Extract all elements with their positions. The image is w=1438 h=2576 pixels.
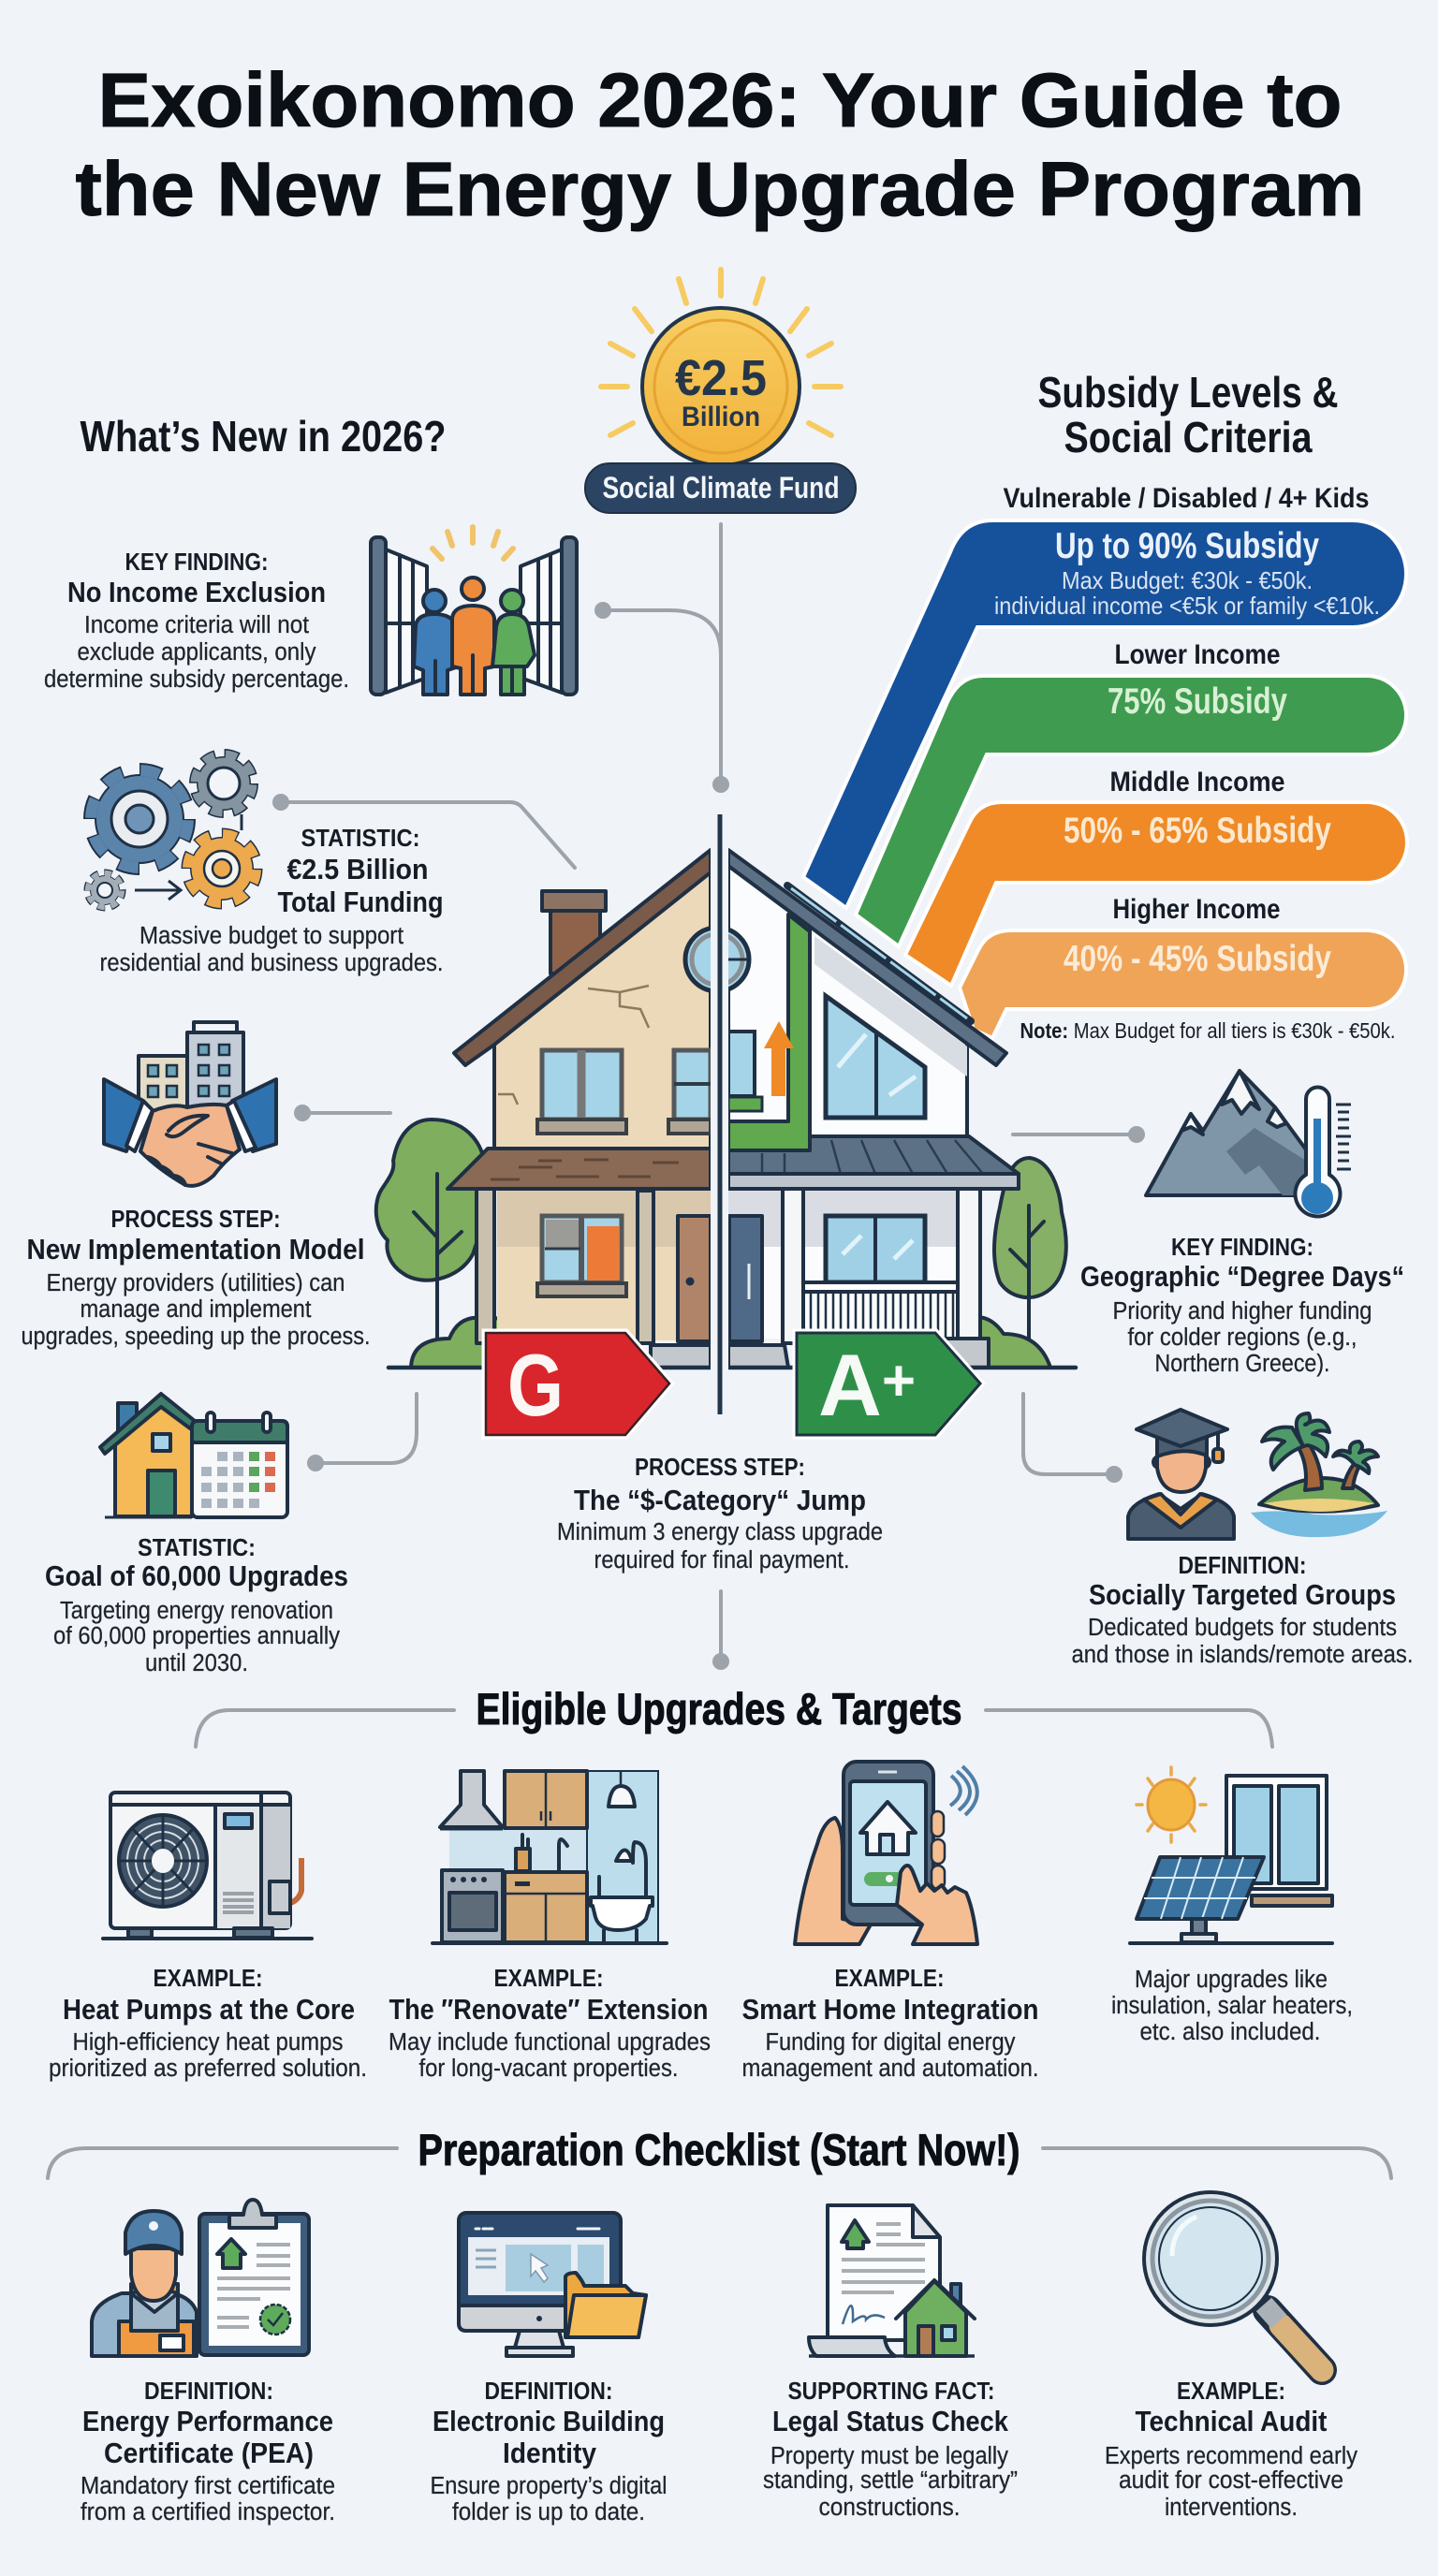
text: Geographic Degree Days: for colder regions (e.g., — [1127, 1325, 1357, 1351]
tier 1 text — [994, 483, 1380, 620]
tier 1 text: Max Budget: €30k - €50k. — [1062, 566, 1313, 594]
connector: fund to house — [594, 524, 729, 793]
badge: Social Climate Fund: Social Climate Fund — [603, 471, 839, 505]
text: Electronic Building Identity: Ensure property’s digital — [431, 2473, 667, 2499]
connector: implementation — [294, 1105, 390, 1121]
heading: Preparation Checklist: Preparation Checklist (Start Now!) — [418, 2125, 1020, 2174]
energy label: G: G — [507, 1336, 564, 1434]
icon: kitchen and bathroom — [433, 1771, 667, 1943]
text: Heat Pumps: EXAMPLE: — [154, 1964, 262, 1992]
text: Technical Audit — [1105, 2377, 1357, 2521]
text: S-Category Jump: Minimum 3 energy class upgrade — [557, 1519, 883, 1545]
text: 2.5 Billion total funding: STATISTIC: — [301, 824, 419, 852]
icon: smartphone smart home — [795, 1762, 977, 1944]
text: New Implementation Model: Energy providers (utilities) can — [47, 1270, 345, 1296]
text: Heat Pumps — [49, 1964, 367, 2082]
cracks — [498, 986, 649, 1264]
text: Major upgrades: Major upgrades like — [1135, 1967, 1328, 1993]
old half: porch roof — [448, 1149, 711, 1189]
icon: gold coin with sun rays: Billion — [682, 402, 760, 432]
text: 2.5 Billion total funding: Total Funding — [277, 886, 444, 918]
text: Technical Audit: Technical Audit — [1135, 2405, 1328, 2437]
tier 2 text: Lower Income — [1114, 639, 1281, 670]
new half: columns — [783, 1189, 980, 1343]
icon: heat pump — [103, 1793, 312, 1939]
text: Electronic Building Identity — [431, 2377, 667, 2525]
title — [75, 58, 1365, 232]
icon: gold coin with sun rays — [601, 270, 841, 465]
tier bar: light orange — [960, 930, 1406, 1038]
text: Legal Status Check — [763, 2377, 1018, 2521]
tree right — [994, 1158, 1066, 1343]
bushes — [411, 1318, 562, 1368]
text: Legal Status Check: Legal Status Check — [772, 2405, 1009, 2437]
text: Renovate Extension: EXAMPLE: — [494, 1964, 603, 1992]
text: Legal Status Check: SUPPORTING FACT: — [788, 2377, 994, 2405]
text: Goal of 60,000 Upgrades: Targeting energy renovation — [60, 1598, 333, 1624]
text: Goal of 60,000 Upgrades: of 60,000 properties annually — [53, 1623, 340, 1649]
tier 4 text: Higher Income — [1112, 894, 1281, 925]
icon: island with palms — [1251, 1413, 1387, 1537]
tier bar: green — [856, 676, 1406, 946]
heading: Subsidy Levels: Social Criteria — [1064, 413, 1313, 461]
tier 1 text: Vulnerable / Disabled / 4+ Kids — [1004, 483, 1369, 514]
text: Technical Audit: Experts recommend early — [1105, 2443, 1357, 2469]
connector: social groups — [1023, 1394, 1123, 1483]
text: Energy Performance Certificate — [81, 2377, 335, 2525]
old half: lower wall — [497, 1191, 711, 1340]
new half: window — [826, 1216, 925, 1282]
text: No Income Exclusion: Income criteria will not — [84, 612, 309, 638]
text: Geographic Degree Days — [1080, 1233, 1404, 1377]
text: Socially Targeted Groups: Dedicated budgets for students — [1088, 1615, 1397, 1641]
text: Socially Targeted Groups — [1071, 1551, 1414, 1668]
text: Renovate Extension: The ″Renovate″ Extension — [389, 1993, 708, 2026]
text: Geographic Degree Days: Northern Greece). — [1155, 1351, 1329, 1377]
heading: Eligible Upgrades and Targets: Eligible Upgrades & Targets — [476, 1684, 962, 1734]
tier bar: blue — [803, 520, 1406, 908]
old half: lower window — [537, 1216, 626, 1296]
tree left — [376, 1120, 486, 1343]
text: Goal of 60,000 Upgrades: until 2030. — [145, 1650, 248, 1676]
text: Smart Home Integration: EXAMPLE: — [835, 1964, 944, 1992]
new half: lower wall — [728, 1189, 972, 1339]
text: Socially Targeted Groups: and those in islands/remote areas. — [1071, 1642, 1414, 1668]
icon: house and calendar — [100, 1394, 287, 1517]
new half: green insulation — [728, 915, 810, 1150]
new half: round window — [685, 928, 749, 991]
text: Heat Pumps: Heat Pumps at the Core — [63, 1993, 355, 2026]
old half: door — [678, 1216, 711, 1341]
text: 2.5 Billion total funding: €2.5 Billion — [286, 853, 429, 886]
arrow: upgrade up — [764, 1021, 794, 1096]
text: Goal of 60,000 Upgrades: Goal of 60,000 Upgrades — [45, 1559, 348, 1592]
text: No Income Exclusion: determine subsidy percentage. — [44, 666, 349, 693]
text: New Implementation Model: manage and implement — [81, 1296, 311, 1323]
new half: porch roof — [728, 1136, 1019, 1189]
tier 4 text: 40% - 45% Subsidy — [1064, 939, 1331, 979]
text: No Income Exclusion — [44, 548, 349, 693]
text: Heat Pumps: prioritized as preferred solution. — [49, 2056, 367, 2082]
old half: columns — [477, 1189, 653, 1343]
text: Energy Performance Certificate: from a certified inspector. — [81, 2499, 335, 2525]
text: 2.5 Billion total funding: Massive budget to support — [139, 923, 404, 949]
energy label: A+: A — [818, 1336, 882, 1434]
text: Legal Status Check: Property must be legally — [770, 2443, 1008, 2469]
tier 2 text — [1108, 639, 1287, 722]
new half: roof — [728, 850, 1006, 1065]
new half: wall — [728, 866, 967, 1140]
tier 4 text — [1064, 894, 1331, 979]
text: Major upgrades: etc. also included. — [1140, 2019, 1320, 2045]
new half: door — [729, 1216, 762, 1341]
text: Renovate Extension — [389, 1964, 711, 2082]
divider line — [717, 814, 723, 1414]
text: Energy Performance Certificate: Mandatory first certificate — [81, 2473, 335, 2499]
icon: legal document with house — [809, 2205, 975, 2356]
title: the New Energy Upgrade Program — [75, 147, 1365, 232]
text: Socially Targeted Groups: Socially Targeted Groups — [1089, 1578, 1396, 1611]
text: S-Category Jump: The “$-Category“ Jump — [574, 1484, 866, 1516]
energy label: G — [486, 1333, 669, 1435]
old half: upper wall — [494, 866, 711, 1151]
new half: centre window — [728, 1032, 762, 1111]
connector: geographic — [1013, 1126, 1145, 1143]
title: Exoikonomo 2026: Your Guide to — [97, 58, 1343, 143]
divider gap — [711, 824, 728, 1415]
text: Heat Pumps: High-efficiency heat pumps — [73, 2029, 343, 2056]
text: 2.5 Billion total funding — [99, 824, 444, 976]
old half: roof — [454, 850, 711, 1065]
tier 3 text — [1064, 767, 1331, 851]
icon: graduate — [1128, 1410, 1234, 1539]
heading: Subsidy Levels — [1037, 368, 1339, 461]
heading: Preparation Checklist — [48, 2125, 1391, 2178]
text: Technical Audit: interventions. — [1165, 2495, 1298, 2521]
text: Smart Home Integration: Funding for digital energy — [766, 2029, 1016, 2056]
icon: inspector with clipboard — [92, 2200, 309, 2356]
icon: window, solar panel and sun — [1130, 1767, 1332, 1943]
text: Major upgrades — [1111, 1967, 1353, 2045]
tier 3 text: Middle Income — [1110, 767, 1284, 798]
new half: triangular window — [826, 996, 925, 1118]
connector: center to upgrades — [712, 1591, 729, 1670]
connector: funding — [272, 794, 575, 868]
text: Renovate Extension: May include functional upgrades — [389, 2029, 711, 2056]
tier 1 text: Up to 90% Subsidy — [1055, 526, 1319, 566]
text: Electronic Building Identity: folder is up to date. — [452, 2499, 645, 2525]
text: Legal Status Check: constructions. — [818, 2495, 961, 2521]
new half: solar strip — [787, 886, 971, 1021]
connector: goal — [307, 1394, 417, 1471]
text: Electronic Building Identity: Electronic Building — [433, 2405, 665, 2437]
old half: centre window — [668, 1050, 711, 1134]
text: New Implementation Model — [21, 1205, 371, 1350]
text: Technical Audit: EXAMPLE: — [1177, 2377, 1285, 2405]
icon: gold coin with sun rays: €2.5 — [675, 350, 767, 406]
text: No Income Exclusion: KEY FINDING: — [125, 548, 268, 576]
text: Major upgrades: insulation, salar heaters, — [1111, 1993, 1353, 2019]
icon: magnifying glass — [1144, 2192, 1322, 2370]
old half: steps — [651, 1345, 711, 1368]
energy label: A+ — [797, 1333, 980, 1435]
icon: gears — [88, 754, 257, 907]
new half: steps — [728, 1345, 788, 1368]
text: New Implementation Model: PROCESS STEP: — [110, 1205, 281, 1233]
icon: handshake with buildings — [104, 1022, 276, 1186]
chimney — [542, 891, 606, 973]
tier bar: orange — [905, 802, 1407, 986]
text: Goal of 60,000 Upgrades: STATISTIC: — [138, 1533, 256, 1561]
heading: What's New: What’s New in 2026? — [81, 412, 446, 461]
text: No Income Exclusion: exclude applicants, only — [77, 639, 316, 666]
illustration: half old and half upgraded house — [376, 814, 1076, 1435]
icon: mountains and thermometer — [1146, 1071, 1351, 1216]
text: No Income Exclusion: No Income Exclusion — [67, 576, 326, 608]
heading: Eligible Upgrades and Targets — [196, 1684, 1272, 1747]
text: Energy Performance Certificate: Energy Performance — [82, 2405, 333, 2437]
text: Legal Status Check: standing, settle “arbitrary” — [763, 2467, 1018, 2494]
icon: open gates with family — [371, 527, 577, 695]
panel: subsidy tiers — [803, 483, 1407, 1043]
text: Geographic Degree Days: KEY FINDING: — [1171, 1233, 1313, 1261]
text: New Implementation Model: New Implementation Model — [26, 1233, 365, 1266]
text: Socially Targeted Groups: DEFINITION: — [1178, 1551, 1307, 1579]
text: Technical Audit: audit for cost-effective — [1119, 2467, 1343, 2494]
ground line — [389, 1366, 1076, 1369]
tier 1 text: individual income <€5k or family <€10k. — [994, 592, 1380, 620]
tier 3 text: 50% - 65% Subsidy — [1064, 811, 1331, 851]
text: Renovate Extension: for long-vacant properties. — [419, 2056, 678, 2082]
text: Electronic Building Identity: DEFINITION: — [485, 2377, 612, 2405]
text: S-Category Jump: PROCESS STEP: — [635, 1453, 805, 1481]
text: Geographic Degree Days: Priority and higher funding — [1112, 1298, 1372, 1325]
text: Smart Home Integration: management and automation. — [741, 2056, 1039, 2082]
badge: Social Climate Fund — [585, 463, 856, 513]
tier 2 text: 75% Subsidy — [1108, 681, 1287, 722]
new half: railing — [803, 1282, 958, 1339]
text: 2.5 Billion total funding: residential and business upgrades. — [99, 950, 444, 976]
text: Energy Performance Certificate: Certificate (PEA) — [104, 2437, 314, 2469]
icon: computer with folder — [459, 2213, 646, 2356]
text: S-Category Jump — [557, 1453, 883, 1573]
text: New Implementation Model: upgrades, speeding up the process. — [21, 1324, 371, 1350]
text: Smart Home Integration — [741, 1964, 1039, 2082]
text: Smart Home Integration: Smart Home Integration — [741, 1993, 1039, 2026]
text: Energy Performance Certificate: DEFINITION: — [144, 2377, 273, 2405]
text: Electronic Building Identity: Identity — [503, 2437, 597, 2469]
note: Note: Max Budget for all tiers is €30k - €50k. — [1020, 1018, 1395, 1043]
heading: Subsidy Levels: Subsidy Levels & — [1037, 368, 1339, 417]
text: S-Category Jump: required for final payment. — [594, 1547, 850, 1573]
energy label: A+: + — [882, 1349, 916, 1413]
text: Goal of 60,000 Upgrades — [45, 1533, 348, 1676]
old half: upper window — [537, 1050, 626, 1134]
